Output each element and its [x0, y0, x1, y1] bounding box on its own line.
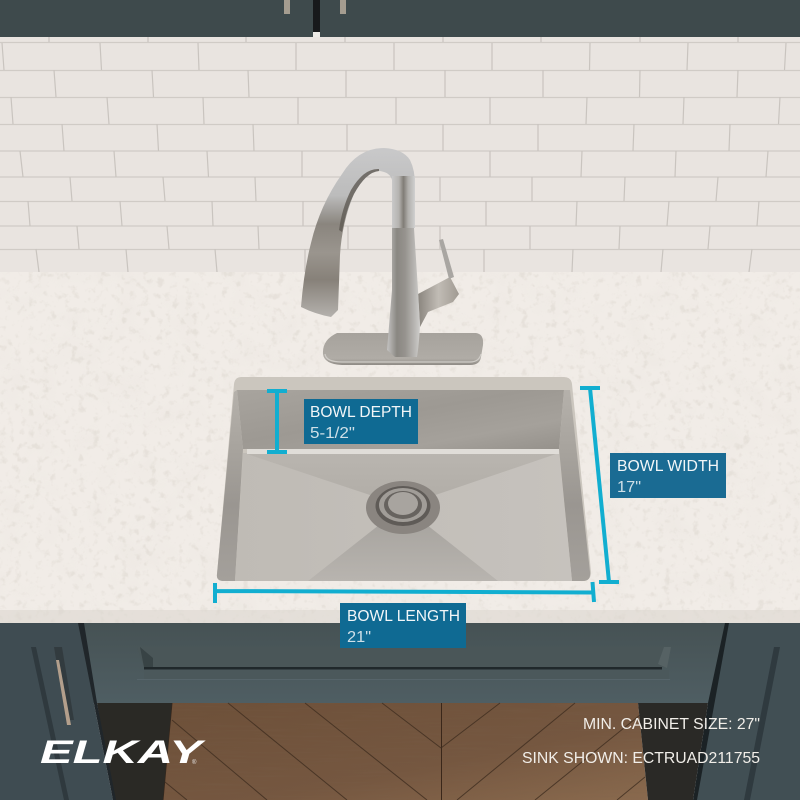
- left wall: [217, 390, 243, 581]
- faucet: [301, 148, 483, 365]
- label: bowl depth: [304, 399, 418, 444]
- faucet body: [387, 228, 420, 357]
- label: bowl length: [340, 603, 466, 648]
- label: bowl width: [610, 453, 726, 498]
- sink model note: SINK SHOWN: ECTRUAD211755: [522, 750, 760, 767]
- countertop: [0, 272, 800, 623]
- sink: [217, 377, 591, 581]
- back wall: [237, 390, 564, 449]
- bowl length dimension marker: [215, 582, 594, 603]
- bowl width dimension marker: [580, 388, 619, 582]
- bowl depth dimension marker: [267, 391, 287, 452]
- label: bowl depth: BOWL DEPTH: [310, 404, 412, 421]
- minimum cabinet size note: MIN. CABINET SIZE: 27": [583, 716, 760, 733]
- sink floor: [235, 453, 572, 581]
- right wall: [559, 390, 590, 581]
- label: bowl length: BOWL LENGTH: [347, 608, 460, 625]
- drain: [366, 481, 440, 534]
- sink rim: [217, 377, 591, 581]
- Elkay logo: ®: [192, 759, 197, 766]
- wood floor: [163, 703, 648, 800]
- label: bowl depth: 5-1/2": [310, 425, 355, 442]
- label: bowl width: BOWL WIDTH: [617, 458, 719, 475]
- label: bowl width: 17": [617, 479, 641, 496]
- right door: [693, 623, 800, 800]
- tiled backsplash: [0, 37, 800, 273]
- Elkay logo: ELKAY: [40, 734, 206, 770]
- floor crease highlight: [247, 449, 559, 454]
- Elkay logo: [40, 734, 206, 770]
- deck plate: [323, 333, 483, 365]
- spout: [301, 148, 415, 317]
- cabinet interior shadows: [97, 703, 708, 800]
- left door: [0, 623, 116, 800]
- faucet handle: [418, 239, 459, 327]
- base cabinet front panel: [0, 623, 800, 703]
- drawer recess: [137, 647, 671, 680]
- label: bowl length: 21": [347, 629, 371, 646]
- door pull handle: [54, 647, 74, 725]
- upper cabinets: [0, 0, 800, 38]
